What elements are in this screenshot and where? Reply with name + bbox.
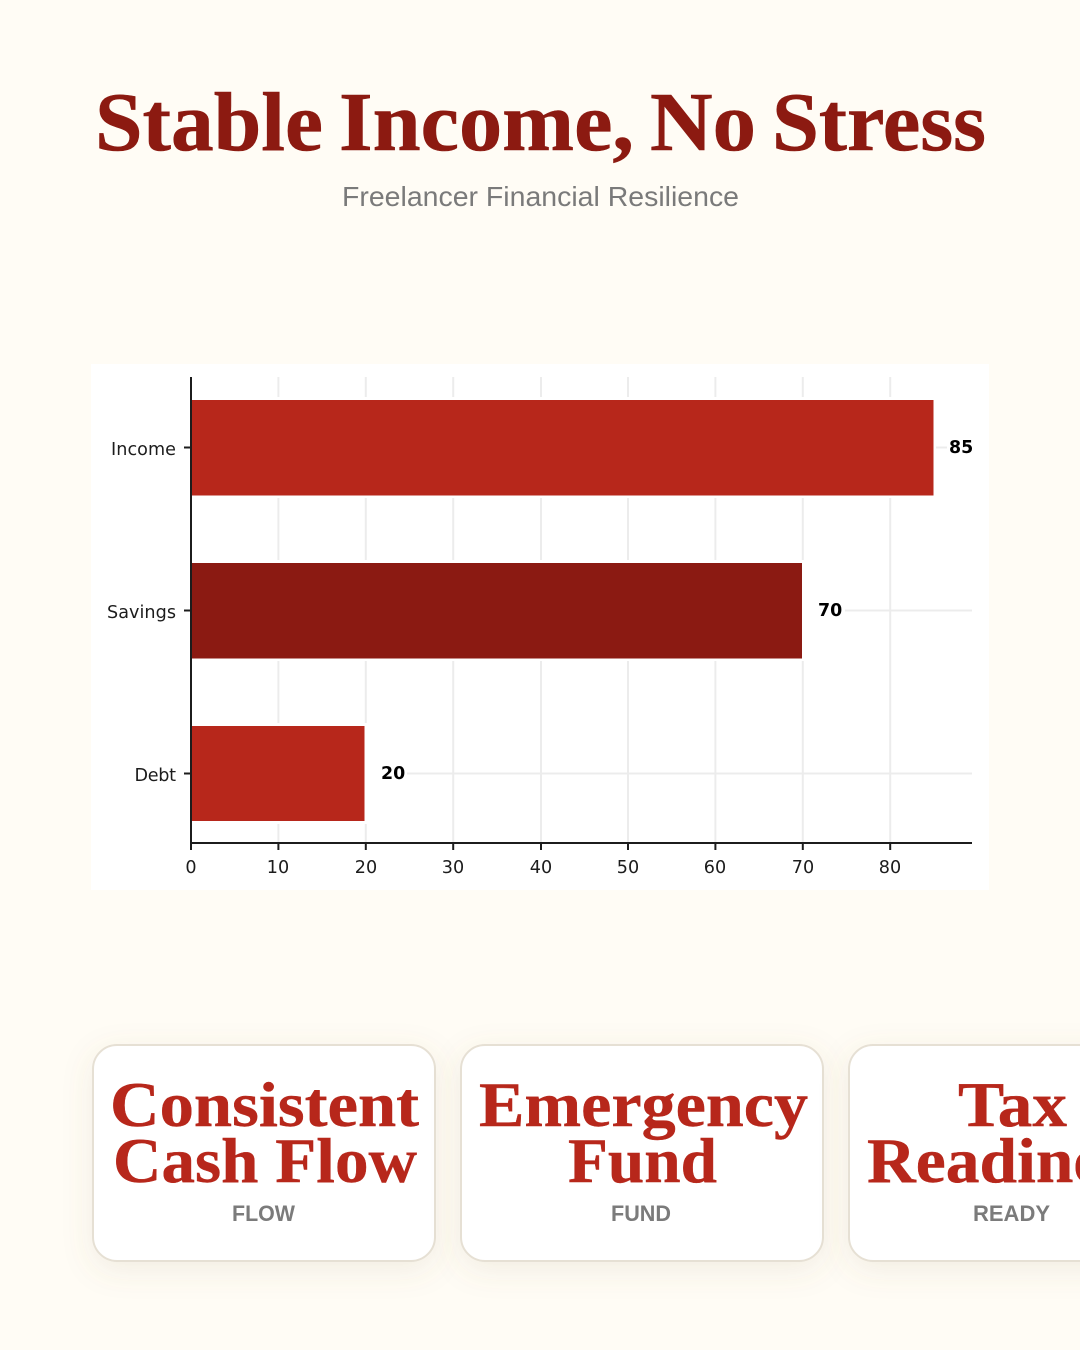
card: Consistent Cash Flow: Cash Flow bbox=[113, 1126, 418, 1196]
y axis with category labels bbox=[107, 377, 191, 844]
subtitle: Freelancer Financial Resilience bbox=[342, 181, 739, 212]
card: Tax Readiness: Tax bbox=[958, 1070, 1068, 1140]
title: No bbox=[650, 76, 756, 169]
x axis with tick labels: 30 bbox=[442, 858, 464, 878]
value label: 70 bbox=[805, 599, 845, 622]
x axis with tick labels: 40 bbox=[530, 858, 552, 878]
card: Emergency Fund: FUND bbox=[611, 1201, 671, 1226]
title: Stable bbox=[95, 76, 323, 169]
card: Consistent Cash Flow: Consistent bbox=[110, 1070, 419, 1140]
title bbox=[95, 76, 986, 169]
x axis with tick labels: 80 bbox=[879, 858, 901, 878]
bar: Debt 20 bbox=[191, 723, 368, 824]
x axis with tick labels: 50 bbox=[617, 858, 639, 878]
panel: bar chart bbox=[91, 364, 989, 890]
value label: 70: 70 bbox=[818, 601, 842, 621]
y axis with category labels: Savings bbox=[107, 603, 176, 623]
y axis with category labels: Debt bbox=[134, 766, 176, 786]
x axis with tick labels: 20 bbox=[355, 858, 377, 878]
x axis with tick labels: 10 bbox=[267, 858, 289, 878]
card: Tax Readiness bbox=[849, 1045, 1080, 1261]
card: Emergency Fund: Emergency bbox=[479, 1070, 808, 1140]
x axis with tick labels bbox=[185, 843, 972, 878]
value label: 20: 20 bbox=[381, 764, 405, 784]
value label: 20 bbox=[367, 762, 407, 785]
value label: 85: 85 bbox=[949, 438, 973, 458]
bar: Savings 70 bbox=[191, 560, 805, 661]
card: Emergency Fund bbox=[461, 1045, 823, 1261]
y axis with category labels: Income bbox=[111, 440, 176, 460]
card: Consistent Cash Flow bbox=[93, 1045, 435, 1261]
x axis with tick labels: 70 bbox=[792, 858, 814, 878]
title: Stress bbox=[772, 76, 986, 169]
title: Income, bbox=[339, 76, 634, 169]
x axis with tick labels: 60 bbox=[704, 858, 726, 878]
card: Emergency Fund: Fund bbox=[568, 1126, 717, 1196]
bar: Income 85 bbox=[191, 397, 936, 498]
card: Consistent Cash Flow: FLOW bbox=[232, 1201, 295, 1226]
x axis with tick labels: 0 bbox=[185, 858, 197, 878]
card: Tax Readiness: READY bbox=[973, 1201, 1050, 1226]
